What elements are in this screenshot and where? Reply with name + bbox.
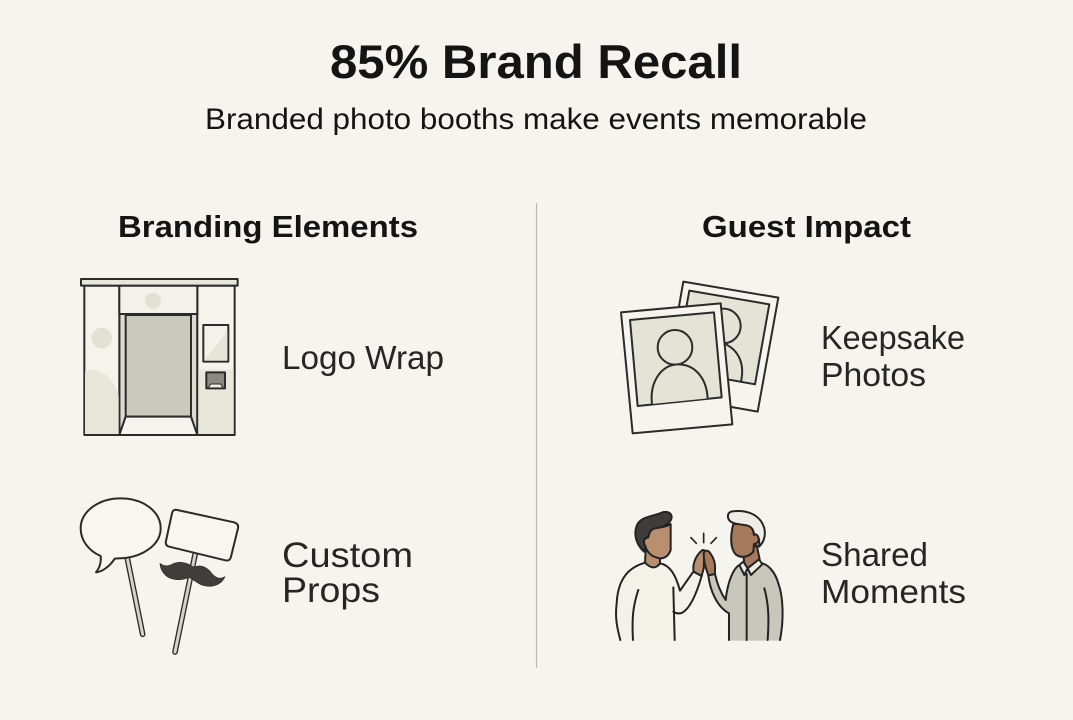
label: Custom Props — [282, 536, 413, 610]
title: 85% Brand Recall — [330, 35, 742, 88]
label: Custom Props: Props — [282, 571, 380, 610]
icon: speech bubble and mustache props — [81, 498, 238, 652]
label: Custom Props: Custom — [282, 536, 413, 575]
person right — [704, 511, 783, 641]
icon: keepsake photos — [621, 282, 778, 433]
label: Keepsake Photos — [821, 319, 965, 393]
person left — [616, 512, 705, 641]
label: Shared Moments: Moments — [821, 573, 966, 610]
label: Shared Moments: Shared — [821, 536, 928, 573]
label: Keepsake Photos: Photos — [821, 356, 926, 393]
label: Logo Wrap: Logo Wrap — [282, 339, 444, 376]
icon: two people high-fiving — [616, 511, 783, 641]
icon: photo booth — [81, 279, 238, 435]
heading: Branding Elements: Branding Elements — [118, 209, 418, 244]
label: Shared Moments — [821, 536, 966, 610]
subtitle: Branded photo booths make events memorable — [205, 103, 867, 136]
heading: Guest Impact: Guest Impact — [702, 209, 911, 244]
sparkle lines — [691, 533, 716, 543]
label: Keepsake Photos: Keepsake — [821, 319, 965, 356]
